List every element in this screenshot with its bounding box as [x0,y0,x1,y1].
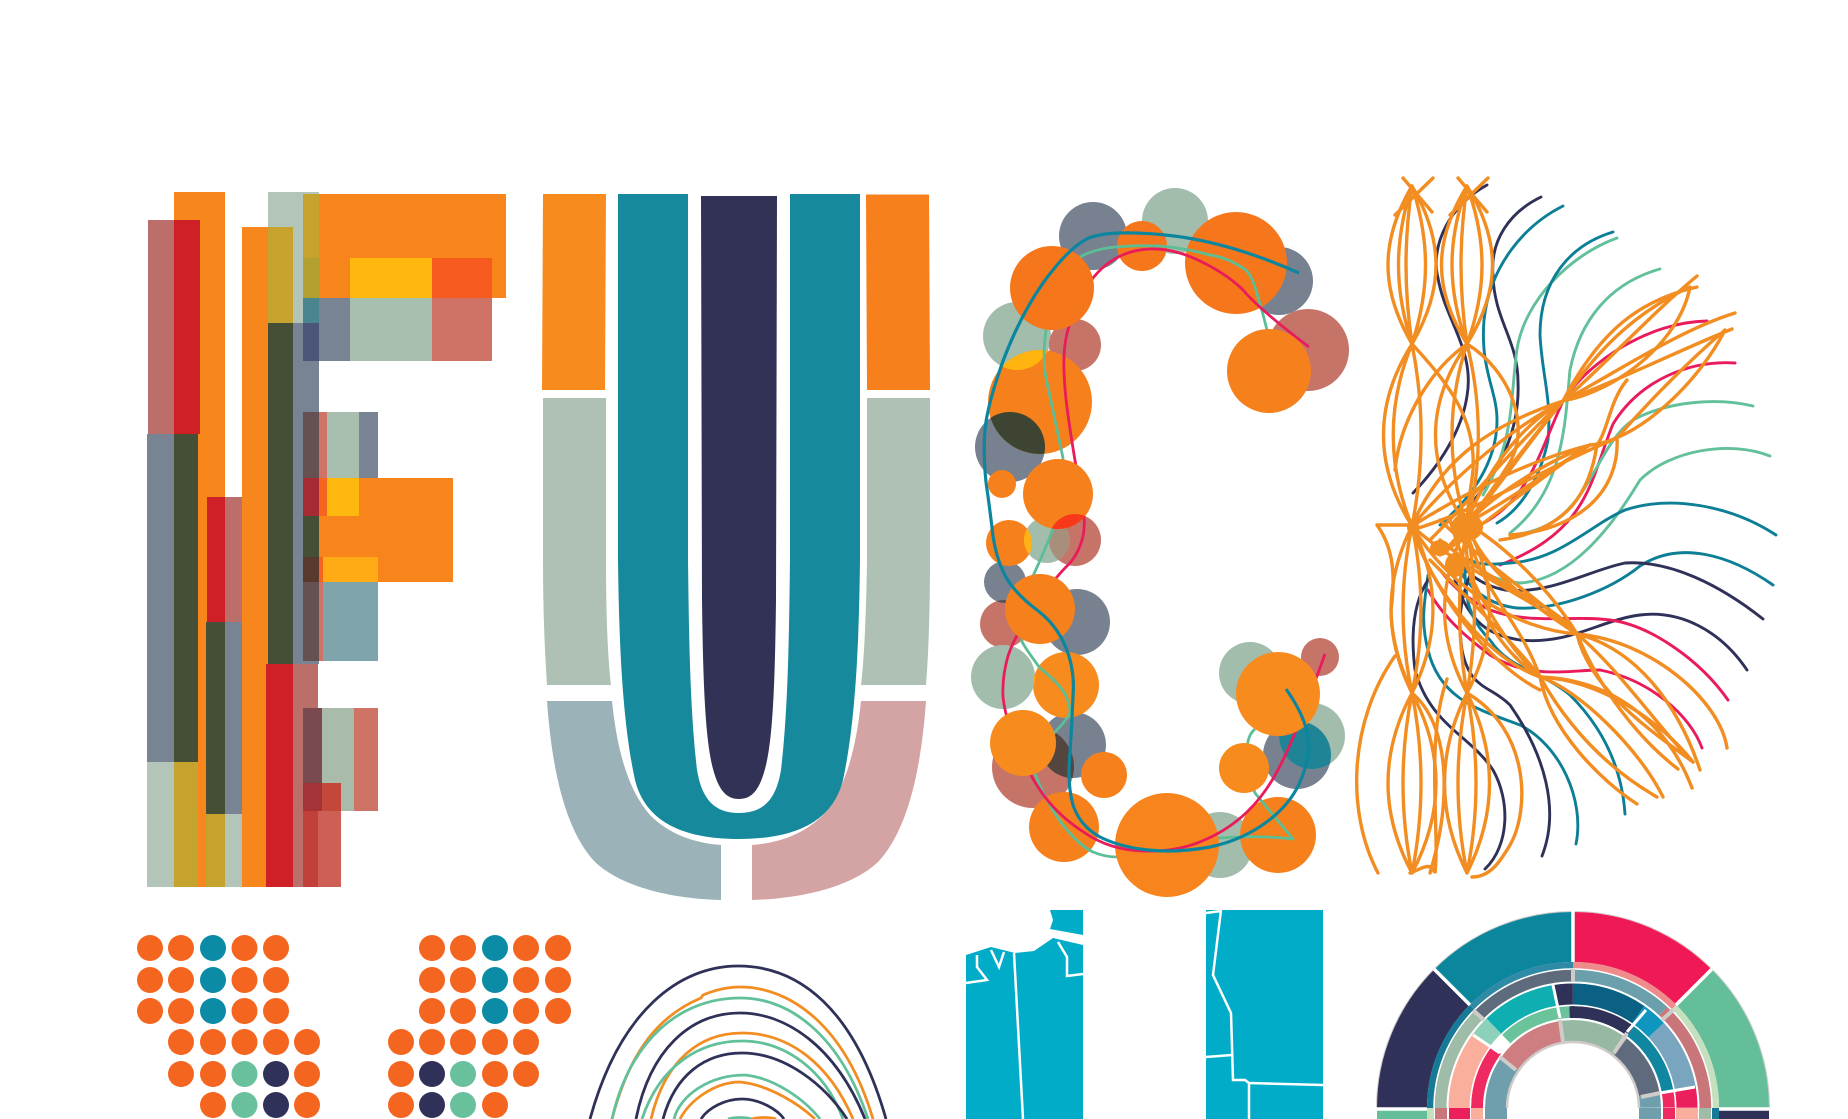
bubble overlaps under orange [980,514,1331,789]
thin second ring [1430,966,1716,1108]
map land [966,910,1083,1119]
orange bubbles behind threads [986,212,1316,873]
orange dots [388,935,571,1118]
fourth ring [1459,994,1687,1108]
muted bubbles [971,188,1349,878]
overlaps on orange bubbles [990,350,1048,688]
teal dots [482,935,508,1024]
lower rim segments below the horizontal gap [1377,1108,1769,1119]
artwork: letters built from chart forms [137,176,1778,1119]
fifth ring [1477,1012,1669,1108]
segment separators [1376,911,1770,1109]
red overlap [1052,514,1085,529]
letter C: bubbles and threads [971,188,1349,897]
orange bubbles above threads [990,246,1320,793]
letter U: nested bands [542,194,930,900]
ring gaps [1434,969,1712,1108]
orange vertical wave bundles [1357,178,1522,877]
left vertical bars [147,192,319,887]
sunburst donut chart [1376,911,1770,1119]
pink lower right band [752,701,926,900]
navy core [701,196,777,799]
map block left [966,910,1083,1119]
green dots [450,1061,476,1118]
teal U [618,194,860,839]
outer ring [1402,937,1744,1108]
third ring [1440,976,1706,1108]
nested arch lines [590,966,886,1119]
lower bars [303,708,378,887]
orange top blocks [542,194,930,390]
state borders [1206,910,1323,1119]
dot grid right [388,935,571,1118]
top arm bars [303,194,506,361]
letter K: flow lines [1357,178,1776,877]
green thread [1022,246,1293,857]
inner ring [1496,1031,1650,1108]
pink thread [1003,249,1325,851]
dot grid left [137,935,320,1118]
map land [1206,910,1323,1119]
coloured flow lines [1413,185,1776,869]
teal thread [984,233,1309,851]
green dots [232,1061,258,1118]
blue-grey lower left band [547,701,721,900]
pale green side bands [543,398,930,685]
state borders [966,942,1083,1119]
orange bubble over green thread [1115,793,1219,897]
orange lower fan [1412,520,1727,804]
middle arm bars [303,412,453,661]
navy dots [419,1061,445,1118]
navy dots [263,1061,289,1118]
teal dots [200,935,226,1024]
orange upper fan [1412,276,1735,555]
map block right [1206,910,1323,1119]
outline [1376,912,1770,1108]
letter F: overlapping stacked bars [147,192,506,887]
orange hub knots [1407,513,1483,577]
orange dots [137,935,320,1118]
